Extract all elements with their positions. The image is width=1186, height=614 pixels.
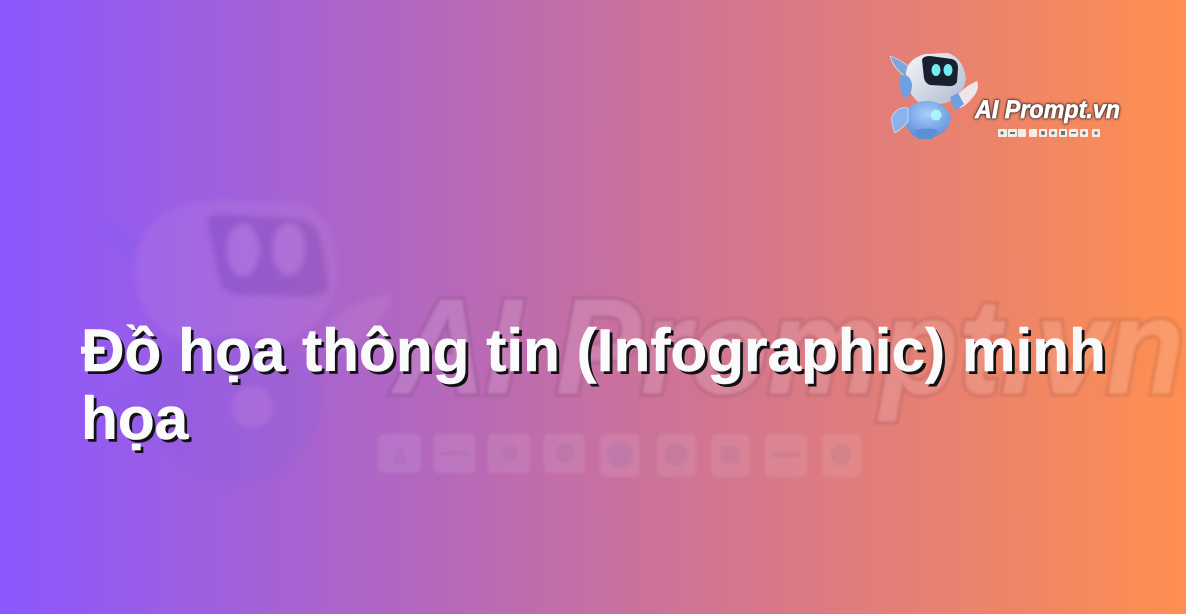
robot body — [904, 101, 951, 138]
robot raised arm — [955, 81, 978, 108]
title: họa — [81, 384, 188, 452]
robot antenna — [890, 56, 914, 78]
logo wordmark: AI Prompt.vn — [974, 96, 1120, 124]
title: Đồ họa thông tin (Infographic) minh — [81, 316, 1106, 384]
watermark: faint icon row — [378, 434, 861, 477]
robot face screen — [922, 56, 958, 86]
watermark: faint robot — [95, 200, 392, 487]
robot head — [906, 53, 966, 106]
logo icon row — [998, 129, 1100, 137]
title — [80, 316, 1106, 453]
icon: robot logo — [890, 53, 978, 139]
